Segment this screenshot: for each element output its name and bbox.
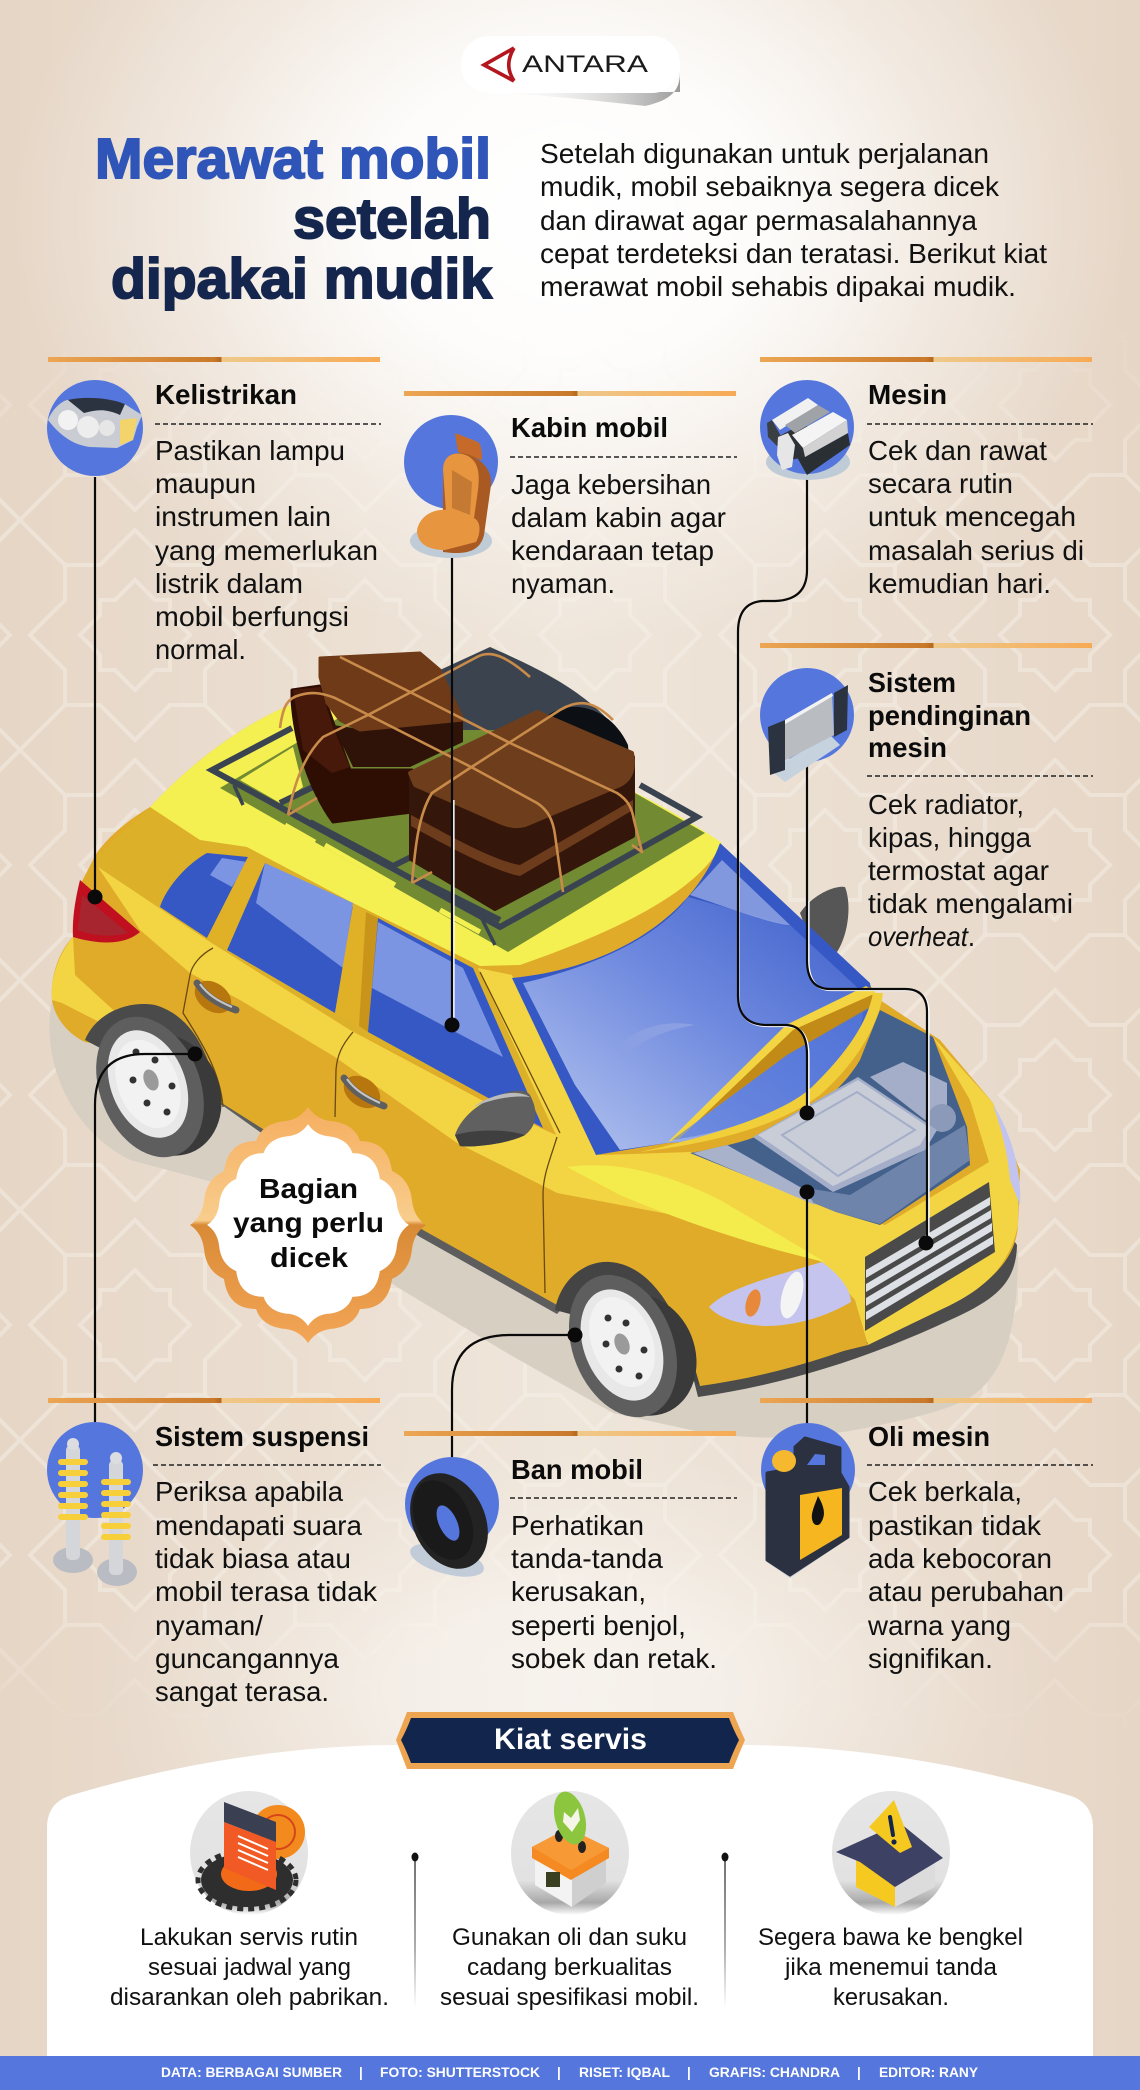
icon: headlamp xyxy=(47,380,143,476)
door handles xyxy=(189,974,386,1115)
body text: listrik dalam xyxy=(155,568,303,599)
body base xyxy=(52,703,1020,1386)
intro text: merawat mobil sehabis dipakai mudik. xyxy=(540,271,1016,302)
body text xyxy=(868,435,1084,599)
ribbon heading xyxy=(396,1712,745,1769)
body text: guncangannya xyxy=(155,1643,339,1674)
body text: warna yang xyxy=(867,1610,1011,1641)
footer credits: RISET: IQBAL xyxy=(579,2065,670,2080)
body text xyxy=(867,1476,1064,1674)
body text: yang memerlukan xyxy=(155,535,378,566)
car illustration xyxy=(49,647,1020,1438)
icon: radiator xyxy=(760,668,854,782)
intro text: dan dirawat agar permasalahannya xyxy=(540,205,977,236)
body text: overheat. xyxy=(868,921,975,952)
footer credits: EDITOR: RANY xyxy=(879,2065,978,2080)
body text: tanda-tanda xyxy=(511,1543,663,1574)
body text: instrumen lain xyxy=(155,501,331,532)
heading: Mesin xyxy=(868,379,947,410)
body text: tidak biasa atau xyxy=(155,1543,351,1574)
heading: Sistem xyxy=(868,667,956,698)
icon: shock absorbers xyxy=(47,1422,143,1586)
body text: Cek radiator, xyxy=(868,789,1024,820)
body text: nyaman/ xyxy=(155,1610,263,1641)
body text: normal. xyxy=(155,634,246,665)
hood underside xyxy=(672,987,875,1140)
tip 1 xyxy=(110,1791,389,2011)
footer credits: FOTO: SHUTTERSTOCK xyxy=(380,2065,540,2080)
badge: Bagian yang perlu dicek: yang perlu xyxy=(233,1207,384,1238)
body text: ada kebocoran xyxy=(868,1543,1052,1574)
tail lamp xyxy=(73,880,140,942)
title: dipakai mudik xyxy=(111,247,492,311)
heading: Oli mesin xyxy=(868,1421,990,1452)
badge: Bagian yang perlu dicek: Bagian xyxy=(259,1173,358,1204)
front side pillar xyxy=(478,968,596,1155)
body text: kemudian hari. xyxy=(868,568,1051,599)
icon: tire xyxy=(395,1457,503,1583)
body text: kerusakan, xyxy=(511,1576,646,1607)
icon: oil and spare parts box xyxy=(511,1788,629,1915)
hood highlight xyxy=(567,1165,825,1262)
rear quarter dark xyxy=(93,807,560,1133)
intro text: mudik, mobil sebaiknya segera dicek xyxy=(540,171,1000,202)
intro text: cepat terdeteksi dan teratasi. Berikut kiat xyxy=(540,238,1047,269)
body text: seperti benjol, xyxy=(511,1610,686,1641)
windshield xyxy=(512,843,871,1155)
title: setelah xyxy=(293,187,491,251)
body text xyxy=(511,1510,717,1674)
tip text: kerusakan. xyxy=(833,1984,949,2011)
panel: Kelistrikan xyxy=(47,357,381,665)
icon: service calendar xyxy=(190,1791,308,1915)
footer credits: | xyxy=(557,2065,561,2080)
side light xyxy=(993,1105,1020,1205)
icon: engine xyxy=(760,380,854,480)
heading: Kabin mobil xyxy=(511,412,668,443)
panel: Kabin mobil xyxy=(404,391,737,599)
beltline light band xyxy=(98,867,1018,1345)
body text xyxy=(511,469,726,599)
front bag side xyxy=(411,757,633,909)
heading: Sistem suspensi xyxy=(155,1421,369,1452)
roof xyxy=(150,703,722,966)
body text: signifikan. xyxy=(868,1643,993,1674)
body text: Perhatikan xyxy=(511,1510,644,1541)
tip text: disarankan oleh pabrikan. xyxy=(110,1984,389,2011)
middle window xyxy=(227,863,353,1013)
engine bay xyxy=(690,1010,970,1225)
icon: oil jug xyxy=(761,1423,855,1578)
footer credits: GRAFIS: CHANDRA xyxy=(709,2065,840,2080)
heading: pendinginan xyxy=(868,700,1031,731)
tip text xyxy=(758,1924,1023,2011)
front side window xyxy=(368,918,543,1128)
body text: sobek dan retak. xyxy=(511,1643,717,1674)
front wheel xyxy=(549,1259,714,1433)
side mirror xyxy=(455,1091,535,1146)
body text: Cek dan rawat xyxy=(868,435,1047,466)
body text: mobil berfungsi xyxy=(155,601,349,632)
ribbon heading: Kiat servis xyxy=(494,1723,647,1756)
footer credits: | xyxy=(359,2065,363,2080)
lower bumper band xyxy=(690,1220,1017,1397)
logo: ANTARA: ANTARA xyxy=(522,51,648,78)
icon: seat xyxy=(404,415,498,558)
body text: Cek berkala, xyxy=(868,1476,1022,1507)
intro text: Setelah digunakan untuk perjalanan xyxy=(540,138,989,169)
footer credits: | xyxy=(857,2065,861,2080)
panel: Mesin xyxy=(760,357,1093,599)
tip text: Segera bawa ke bengkel xyxy=(758,1924,1023,1951)
body text: atau perubahan xyxy=(868,1576,1064,1607)
body text: Jaga kebersihan xyxy=(511,469,711,500)
hood rim xyxy=(640,993,883,1152)
body text: maupun xyxy=(155,468,256,499)
icon: workshop warning xyxy=(832,1791,950,1915)
panel: Kiat servis xyxy=(47,1712,1093,2056)
tip text: sesuai jadwal yang xyxy=(148,1954,351,1981)
ropes xyxy=(340,657,642,852)
body text xyxy=(155,435,378,665)
intro text xyxy=(540,138,1047,302)
tip text xyxy=(440,1924,699,2011)
rear bag dark xyxy=(292,686,412,822)
body text: mobil terasa tidak xyxy=(155,1576,378,1607)
dividers xyxy=(412,1852,728,2008)
grille xyxy=(865,1182,995,1331)
panel: Ban mobil xyxy=(395,1431,737,1674)
heading: mesin xyxy=(868,732,947,763)
footer credits: DATA: BERBAGAI SUMBER xyxy=(161,2065,342,2080)
body text xyxy=(155,1476,378,1707)
body text: secara rutin xyxy=(868,468,1013,499)
tip text: cadang berkualitas xyxy=(467,1954,672,1981)
tip text: sesuai spesifikasi mobil. xyxy=(440,1984,699,2011)
rear bag top xyxy=(320,653,463,730)
pillar between windows xyxy=(335,905,378,1032)
tip text xyxy=(110,1924,389,2011)
rear window xyxy=(160,853,248,938)
panel: Sistem pendinginan mesin xyxy=(760,643,1093,952)
body text: masalah serius di xyxy=(868,535,1084,566)
badge: Bagian yang perlu dicek xyxy=(190,1107,426,1343)
headlight xyxy=(709,1262,851,1326)
ground shadow xyxy=(49,1000,1018,1438)
body text: Periksa apabila xyxy=(155,1476,343,1507)
logo: ANTARA xyxy=(461,36,680,106)
body text: Pastikan lampu xyxy=(155,435,345,466)
footer credits xyxy=(0,2056,1140,2090)
roof mat xyxy=(220,670,705,952)
body text: mendapati suara xyxy=(155,1510,362,1541)
connector lines xyxy=(88,475,934,1462)
heading xyxy=(868,667,1031,763)
tip text: Lakukan servis rutin xyxy=(140,1924,358,1951)
body text: tidak mengalami xyxy=(868,888,1073,919)
tip text: Gunakan oli dan suku xyxy=(452,1924,687,1951)
tip text: jika menemui tanda xyxy=(784,1954,997,1981)
front lower fender dark xyxy=(457,1143,868,1386)
body text: untuk mencegah xyxy=(868,501,1076,532)
body text: termostat agar xyxy=(868,855,1049,886)
rear bumper light xyxy=(52,937,122,1025)
sill xyxy=(215,1100,570,1314)
far mirror xyxy=(800,887,848,952)
door lines xyxy=(183,948,560,1293)
panel: Sistem suspensi xyxy=(47,1398,381,1707)
title xyxy=(95,127,492,311)
body text xyxy=(868,789,1073,952)
tip 2 xyxy=(440,1788,699,2011)
body text: dalam kabin agar xyxy=(511,502,726,533)
front bag top xyxy=(410,712,633,826)
badge: Bagian yang perlu dicek: dicek xyxy=(270,1242,348,1273)
body text: nyaman. xyxy=(511,568,615,599)
body text: kipas, hingga xyxy=(868,822,1031,853)
heading: Kelistrikan xyxy=(155,379,297,410)
black bag xyxy=(440,647,633,775)
rear wheel xyxy=(76,1001,239,1173)
footer credits: | xyxy=(687,2065,691,2080)
heading: Ban mobil xyxy=(511,1454,643,1485)
body text: kendaraan tetap xyxy=(511,535,714,566)
panel: Oli mesin xyxy=(760,1398,1093,1674)
tip 3 xyxy=(758,1791,1023,2011)
roof rack xyxy=(212,728,697,945)
body text: sangat terasa. xyxy=(155,1676,329,1707)
engine parts xyxy=(693,1125,970,1224)
luggage xyxy=(280,647,642,909)
body text: pastikan tidak xyxy=(868,1510,1042,1541)
title: Merawat mobil xyxy=(95,127,491,191)
